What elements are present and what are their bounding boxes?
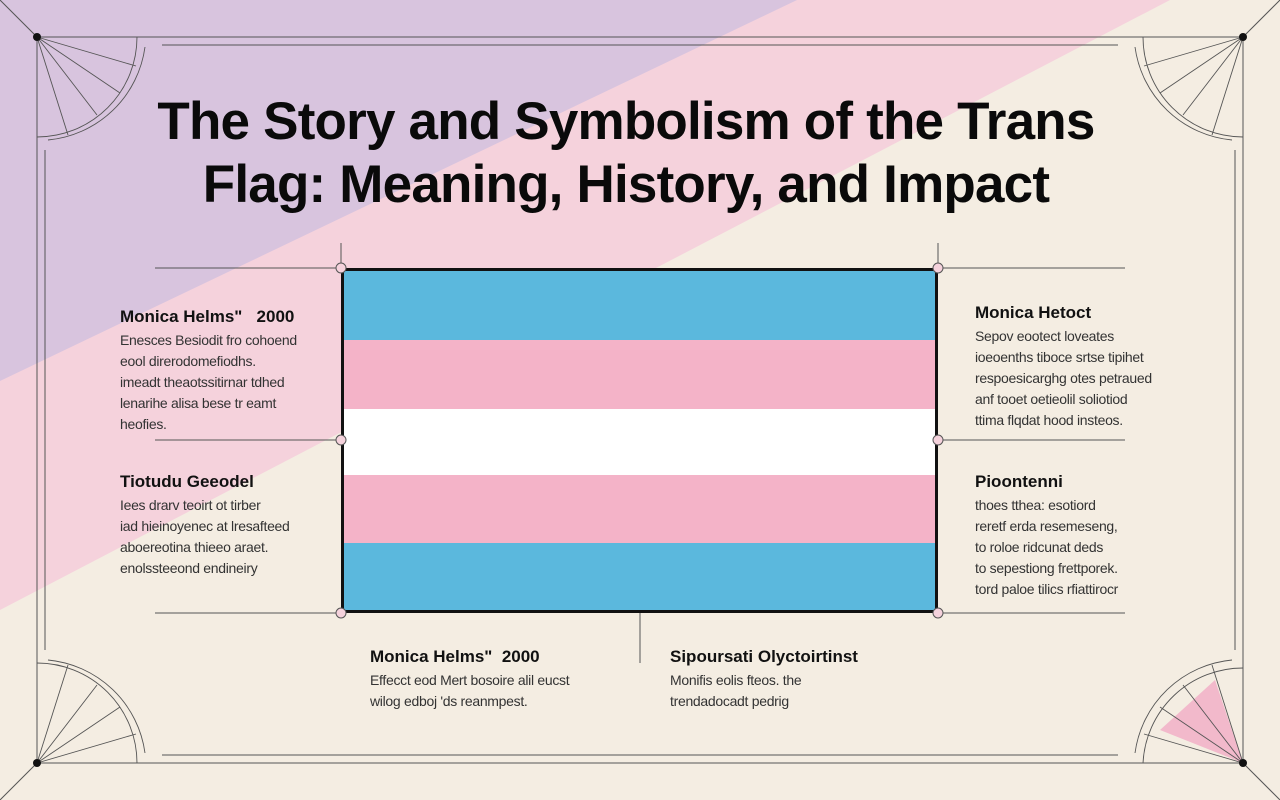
text block: bottom center-right [670, 647, 858, 709]
text block: right top: ioeoenths tiboce srtse tipihet [975, 349, 1143, 365]
title: Flag: Meaning, History, and Impact [203, 155, 1049, 214]
text block: right top: ttima flqdat hood insteos. [975, 412, 1123, 428]
text block: left bottom: Iees drarv teoirt ot tirber [120, 497, 261, 513]
text block: left top: Enesces Besiodit fro cohoend [120, 332, 297, 348]
text block: right top: Sepov eootect loveates [975, 328, 1114, 344]
text block: bottom center-right: trendadocadt pedrig [670, 693, 789, 709]
text block: right bottom: to roloe ridcunat deds [975, 539, 1103, 555]
text block: left bottom: iad hieinoyenec at lresafteed [120, 518, 290, 534]
text block: bottom center-left: Monica Helms" 2000 [370, 647, 540, 666]
flag [341, 268, 938, 613]
text block: right bottom: Pioontenni [975, 472, 1063, 491]
text block: left top: heofies. [120, 416, 167, 432]
text block: left top [120, 307, 297, 432]
text block: right top: respoesicarghg otes petraued [975, 370, 1152, 386]
text block: left bottom: enolssteeond endineiry [120, 560, 257, 576]
text block: bottom center-right: Sipoursati Olyctoirtinst [670, 647, 858, 666]
title [157, 92, 1095, 214]
text block: left top: imeadt theaotssitirnar tdhed [120, 374, 284, 390]
text block: bottom center-left [370, 647, 570, 709]
text block: bottom center-right: Monifis eolis fteos. the [670, 672, 801, 688]
text block: left top: lenarihe alisa bese tr eamt [120, 395, 276, 411]
text block: left bottom: Tiotudu Geeodel [120, 472, 254, 491]
text block: right bottom [975, 472, 1118, 597]
text block: right bottom: reretf erda resemeseng, [975, 518, 1118, 534]
text block: bottom center-left: Effecct eod Mert bosoire alil eucst [370, 672, 569, 688]
text block: right bottom: thoes tthea: esotiord [975, 497, 1096, 513]
text block: left bottom: aboereotina thieeo araet. [120, 539, 268, 555]
text block: right top: anf tooet oetieolil soliotiod [975, 391, 1127, 407]
text block: right top [975, 303, 1152, 428]
title: The Story and Symbolism of the Trans [157, 92, 1095, 151]
text block: right bottom: to sepestiong frettporek. [975, 560, 1118, 576]
text block: right top: Monica Hetoct [975, 303, 1091, 322]
text block: bottom center-left: wilog edboj 'ds reanmpest. [370, 693, 528, 709]
text block: left bottom [120, 472, 290, 576]
text block: left top: eool direrodomefiodhs. [120, 353, 256, 369]
text block: right bottom: tord paloe tilics rfiattirocr [975, 581, 1118, 597]
text block: left top: Monica Helms" 2000 [120, 307, 294, 326]
